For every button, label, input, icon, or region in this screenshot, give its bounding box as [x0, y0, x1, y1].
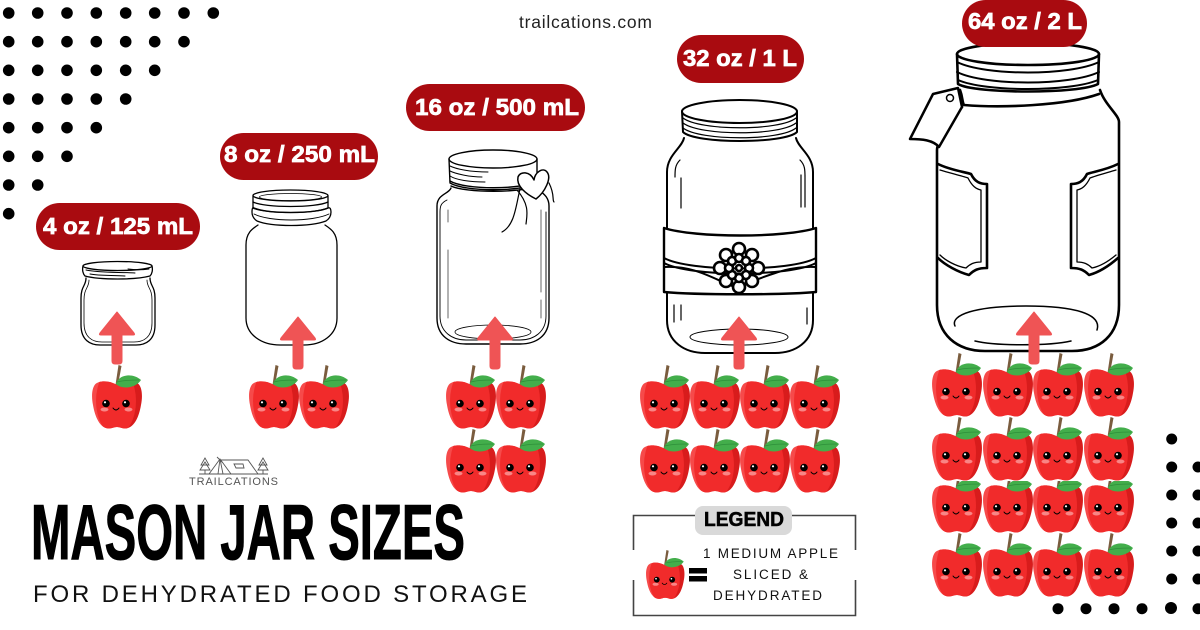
- legend text: SLICED &: [733, 567, 808, 582]
- arrow: apples to 16 oz jar: [477, 317, 513, 369]
- panel: legend: [634, 506, 856, 616]
- icon: tent and trees: [199, 457, 268, 474]
- arrow: apple to 4 oz jar: [99, 312, 135, 364]
- apples: 4 oz: [91, 365, 144, 435]
- icon: heart tag: [518, 170, 549, 199]
- logo wordmark: TRAILCATIONS: [189, 476, 278, 488]
- icon: legend apple: [645, 550, 686, 604]
- jar outline: 64 oz: [937, 43, 1119, 351]
- size label: 8 oz: [220, 133, 378, 180]
- apples: 8 oz: [248, 365, 351, 435]
- legend text: 1 MEDIUM APPLE: [703, 546, 838, 561]
- panel: 32 oz jar: [639, 35, 842, 499]
- jar outline: 8 oz: [246, 190, 337, 345]
- size label: 4 oz: [36, 203, 200, 250]
- size label: 64 oz: 64 oz / 2 L: [968, 8, 1082, 34]
- icon: hanging tag: [910, 88, 962, 147]
- jar outline: 16 oz: [437, 150, 554, 344]
- panel: 16 oz jar: [406, 84, 585, 499]
- size label: 16 oz: [406, 84, 585, 131]
- size label: 32 oz: [677, 35, 804, 83]
- legend text: DEHYDRATED: [713, 588, 822, 603]
- size label: 64 oz: [962, 0, 1087, 47]
- arrow: apples to 8 oz jar: [280, 317, 316, 369]
- legend heading: LEGEND: [704, 509, 784, 531]
- apples: 16 oz: [445, 365, 548, 499]
- title: MASON JAR SIZES: [31, 488, 465, 576]
- decorative dots: top left: [3, 7, 219, 220]
- logo: Trailcations: [189, 457, 278, 488]
- size label: 4 oz: 4 oz / 125 mL: [43, 213, 193, 239]
- size label: 32 oz: 32 oz / 1 L: [683, 45, 797, 71]
- subtitle: FOR DEHYDRATED FOOD STORAGE: [33, 581, 527, 608]
- jar outline: 32 oz: [667, 100, 813, 353]
- apples: 64 oz: [931, 353, 1136, 603]
- legend heading: [695, 506, 792, 535]
- panel: 8 oz jar: [220, 133, 378, 435]
- size label: 8 oz: 8 oz / 250 mL: [224, 141, 375, 167]
- panel: 4 oz jar: [36, 203, 200, 435]
- website url: trailcations.com: [519, 12, 652, 32]
- legend text: [703, 546, 838, 603]
- decorative dots: bottom right: [1052, 434, 1200, 614]
- arrow: apples to 64 oz jar: [1016, 312, 1052, 364]
- icon: equals sign: [689, 568, 707, 582]
- icon: flower: [714, 243, 764, 293]
- size label: 16 oz: 16 oz / 500 mL: [415, 94, 579, 120]
- panel: 64 oz jar: [910, 0, 1136, 603]
- apples: 32 oz: [639, 365, 842, 499]
- legend frame: [634, 516, 856, 616]
- band with flower: [664, 228, 816, 294]
- jar outline: 4 oz: [81, 262, 155, 345]
- arrow: apples to 32 oz jar: [721, 317, 757, 369]
